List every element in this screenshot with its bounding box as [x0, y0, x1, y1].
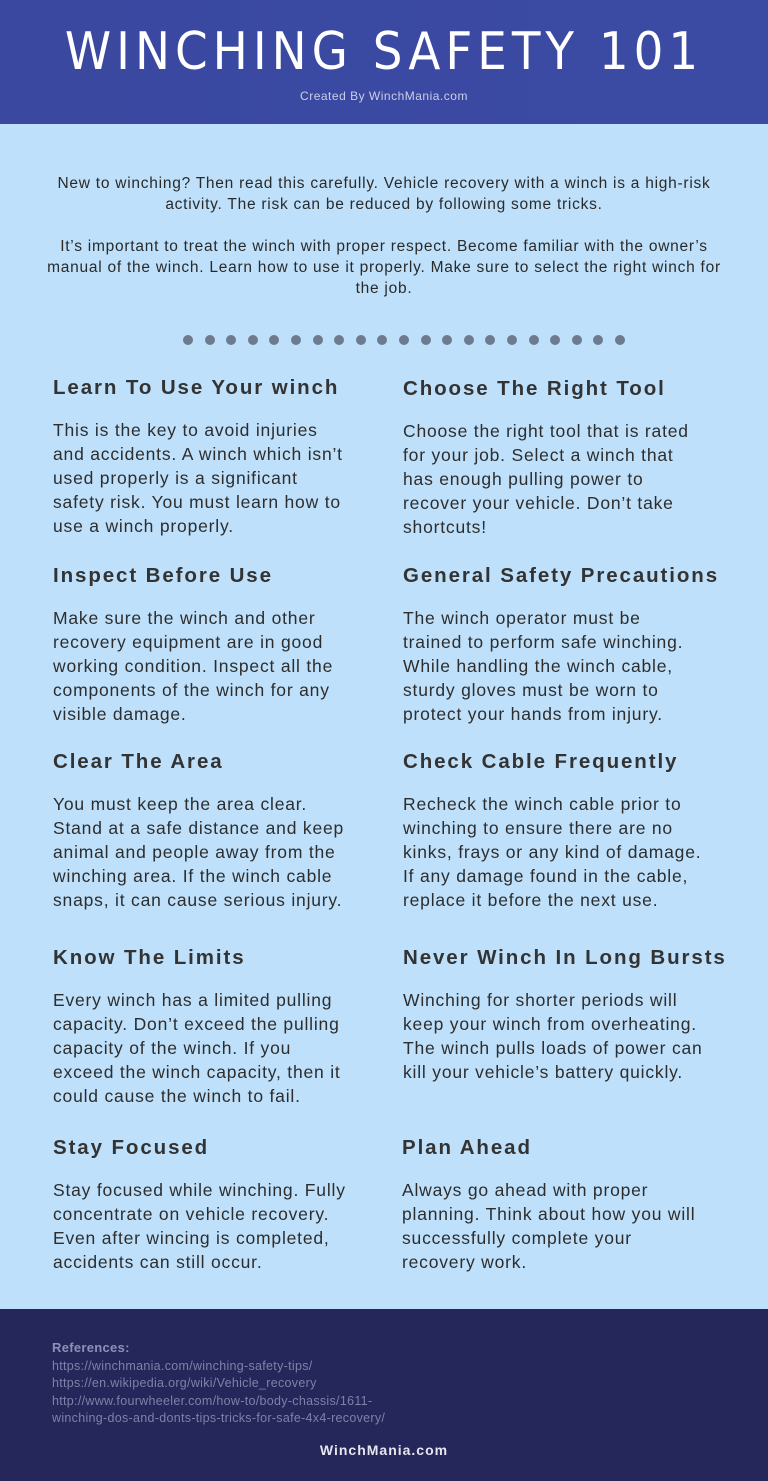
references: winching-dos-and-donts-tips-tricks-for-safe-4x4-recovery/ — [52, 1411, 385, 1425]
section: long bursts — [403, 946, 727, 1082]
references: References: — [52, 1340, 130, 1355]
section: plan ahead: successfully complete your — [402, 1228, 632, 1248]
section: check cable: Check Cable Frequently — [403, 750, 678, 773]
references: http://www.fourwheeler.com/how-to/body-chassis/1611- — [52, 1394, 372, 1408]
section: choose right tool: has enough pulling power to — [403, 469, 644, 489]
section: long bursts: keep your winch from overheating. — [403, 1014, 697, 1034]
section: plan ahead: Plan Ahead — [402, 1136, 532, 1159]
section: choose right tool — [403, 377, 689, 537]
section: general safety — [403, 564, 719, 724]
section: clear area: snaps, it can cause serious injury. — [53, 890, 342, 910]
section: inspect: Inspect Before Use — [53, 564, 273, 587]
section: learn to use: used properly is a significant — [53, 468, 298, 488]
references: https://winchmania.com/winching-safety-tips/ — [52, 1358, 313, 1372]
subtitle: Created By WinchMania.com — [300, 89, 468, 103]
section: general safety: trained to perform safe winching. — [403, 632, 683, 652]
section: long bursts: Never Winch In Long Bursts — [403, 946, 727, 969]
section: general safety: The winch operator must be — [403, 608, 641, 628]
section: check cable: Recheck the winch cable prior to — [403, 794, 682, 814]
section: know limits: Know The Limits — [53, 946, 246, 969]
references: https://en.wikipedia.org/wiki/Vehicle_recovery — [52, 1376, 317, 1390]
section: general safety: protect your hands from injury. — [403, 704, 663, 724]
section: learn to use: safety risk. You must learn how to — [53, 492, 341, 512]
section: choose right tool: shortcuts! — [403, 517, 487, 537]
section: learn to use: and accidents. A winch which isn’t — [53, 444, 343, 464]
section: stay focused: concentrate on vehicle recovery. — [53, 1204, 329, 1224]
section: plan ahead: planning. Think about how you will — [402, 1204, 695, 1224]
section: know limits: could cause the winch to fail. — [53, 1086, 301, 1106]
section: clear area — [53, 750, 344, 910]
section: general safety: While handling the winch cable, — [403, 656, 673, 676]
section: inspect: components of the winch for any — [53, 680, 330, 700]
section: check cable — [403, 750, 701, 910]
section: stay focused: Even after wincing is completed, — [53, 1228, 330, 1248]
section: stay focused — [53, 1136, 346, 1272]
section: clear area: Stand at a safe distance and keep — [53, 818, 344, 838]
section: check cable: kinks, frays or any kind of damage. — [403, 842, 701, 862]
section: learn to use: Learn To Use Your winch — [53, 376, 339, 399]
intro paragraph 1: New to winching? Then read this carefully. Vehicle recovery with a winch is a high-risk — [57, 175, 711, 192]
section: stay focused: Stay Focused — [53, 1136, 209, 1159]
dotted divider — [183, 335, 625, 345]
section: choose right tool: recover your vehicle. Don’t take — [403, 493, 674, 513]
intro paragraph 1 — [57, 175, 711, 213]
intro paragraph 2: the job. — [356, 280, 412, 297]
intro paragraph 2: manual of the winch. Learn how to use it properly. Make sure to select the right winch for — [47, 259, 721, 276]
section: learn to use: use a winch properly. — [53, 516, 234, 536]
section: inspect: Make sure the winch and other — [53, 608, 316, 628]
section: stay focused: Stay focused while winching. Fully — [53, 1180, 346, 1200]
section: know limits: capacity. Don’t exceed the pulling — [53, 1014, 340, 1034]
section: general safety: General Safety Precautions — [403, 564, 719, 587]
section: know limits: capacity of the winch. If you — [53, 1038, 291, 1058]
intro paragraph 2: It’s important to treat the winch with proper respect. Become familiar with the owner’s — [60, 238, 708, 255]
section: know limits — [53, 946, 341, 1106]
section: inspect: working condition. Inspect all the — [53, 656, 333, 676]
section: clear area: Clear The Area — [53, 750, 224, 773]
intro paragraph 2 — [47, 238, 721, 297]
section: check cable: winching to ensure there are no — [403, 818, 673, 838]
section: choose right tool: Choose the right tool that is rated — [403, 421, 689, 441]
intro paragraph 1: activity. The risk can be reduced by following some tricks. — [165, 196, 603, 213]
section: learn to use — [53, 376, 343, 536]
section: inspect: recovery equipment are in good — [53, 632, 323, 652]
section: long bursts: The winch pulls loads of power can — [403, 1038, 703, 1058]
section: plan ahead — [402, 1136, 695, 1272]
section: choose right tool: Choose The Right Tool — [403, 377, 666, 400]
section: inspect — [53, 564, 333, 724]
section: general safety: sturdy gloves must be worn to — [403, 680, 659, 700]
section: long bursts: Winching for shorter periods will — [403, 990, 677, 1010]
section: clear area: animal and people away from the — [53, 842, 336, 862]
section: know limits: Every winch has a limited pulling — [53, 990, 332, 1010]
section: plan ahead: Always go ahead with proper — [402, 1180, 648, 1200]
section: know limits: exceed the winch capacity, then it — [53, 1062, 341, 1082]
section: learn to use: This is the key to avoid injuries — [53, 420, 318, 440]
section: stay focused: accidents can still occur. — [53, 1252, 262, 1272]
section: check cable: If any damage found in the cable, — [403, 866, 688, 886]
section: plan ahead: recovery work. — [402, 1252, 527, 1272]
section: inspect: visible damage. — [53, 704, 187, 724]
footer — [0, 1309, 768, 1481]
section: choose right tool: for your job. Select a winch that — [403, 445, 674, 465]
references — [52, 1340, 385, 1425]
header banner — [0, 0, 768, 124]
section: check cable: replace it before the next use. — [403, 890, 658, 910]
section: clear area: You must keep the area clear. — [53, 794, 307, 814]
section: clear area: winching area. If the winch cable — [53, 866, 332, 886]
brand: WinchMania.com — [320, 1442, 448, 1458]
title: WINCHING SAFETY 101 — [65, 22, 703, 82]
section: long bursts: kill your vehicle’s battery quickly. — [403, 1062, 683, 1082]
